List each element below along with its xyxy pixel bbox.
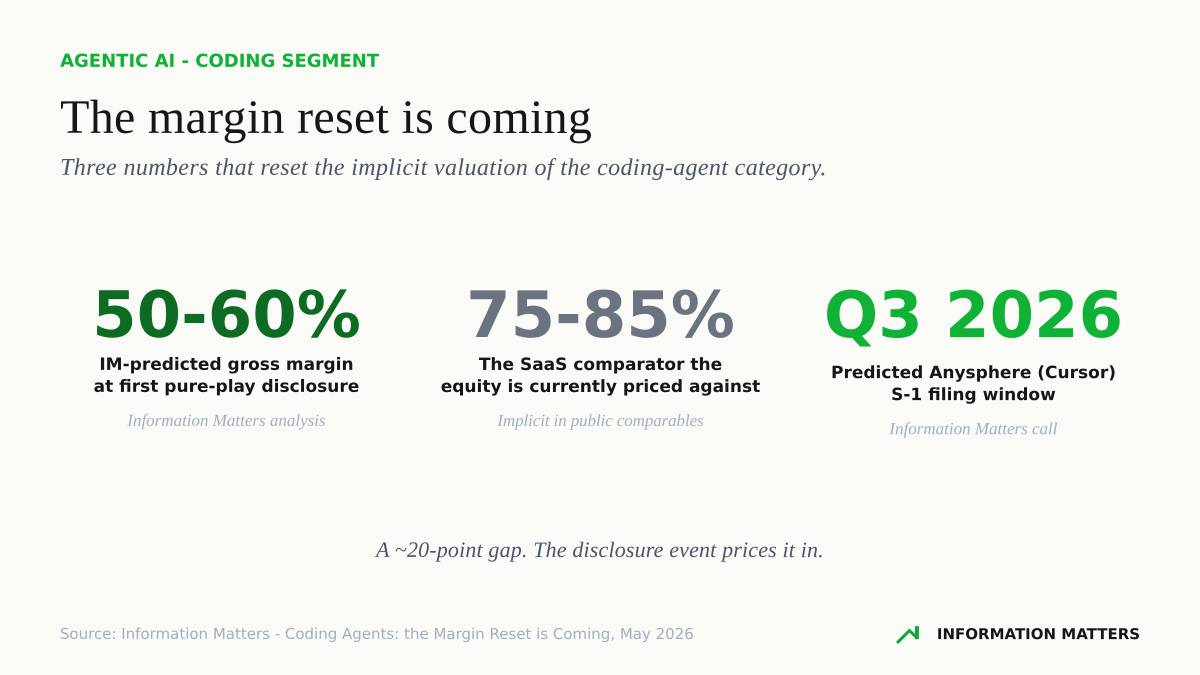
eyebrow label: AGENTIC AI - CODING SEGMENT (60, 51, 379, 72)
value: Q3 2026: Q3 2026 (824, 279, 1123, 353)
source: analysis: Information Matters analysis (127, 411, 326, 430)
takeaway: A ~20-point gap. The disclosure event prices it in. (376, 537, 824, 562)
description: filing window: Predicted Anysphere (Cursor) (831, 363, 1116, 383)
brand name: INFORMATION MATTERS (937, 625, 1140, 643)
description: SaaS comparator: The SaaS comparator the (479, 355, 722, 375)
description: gross margin (94, 355, 359, 397)
description: gross margin: at first pure-play disclosure (94, 377, 359, 397)
description: filing window (831, 363, 1116, 405)
stat: gross margin (92, 279, 361, 430)
source: public comparables: Implicit in public comparables (497, 411, 704, 430)
value: 50-60%: 50-60% (92, 279, 361, 353)
stat: SaaS comparator (441, 279, 760, 430)
value: 75-85%: 75-85% (466, 279, 735, 353)
description: gross margin: IM-predicted gross margin (99, 355, 354, 375)
subtitle: Three numbers that reset the implicit valuation of the coding-agent category. (60, 155, 827, 181)
source: IM call: Information Matters call (889, 419, 1058, 438)
title: The margin reset is coming (60, 91, 592, 144)
stat: S-1 filing window (824, 279, 1123, 438)
description: SaaS comparator (441, 355, 760, 397)
source footnote: Source: Information Matters - Coding Agents: the Margin Reset is Coming, May 2026 (60, 625, 694, 643)
icon: logo trend arrow (896, 626, 919, 644)
description: SaaS comparator: equity is currently priced against (441, 377, 760, 397)
description: filing window: S-1 filing window (891, 385, 1056, 405)
